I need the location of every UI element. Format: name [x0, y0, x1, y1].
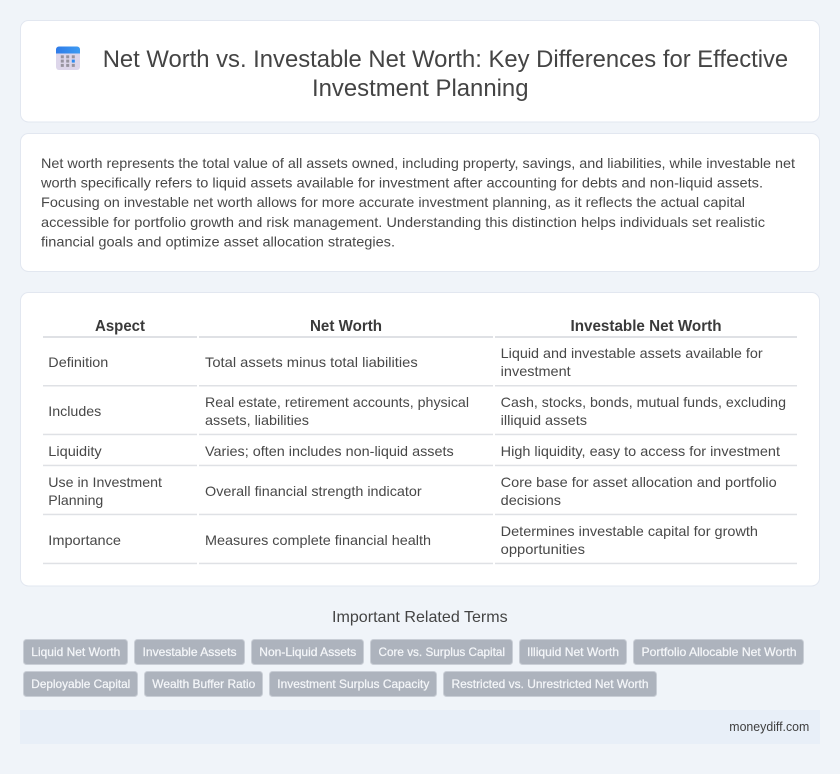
row: liquidity: High liquidity, easy to access for investment [501, 443, 780, 459]
row: definition: Liquid and investable assets available for [501, 345, 763, 361]
row: liquidity: Varies; often includes non-liquid assets [205, 443, 454, 459]
title: Net Worth vs. Investable Net Worth: Key Differences for Effective [103, 46, 788, 73]
related term tags: Illiquid Net Worth [527, 645, 619, 659]
related term tags: Investable Assets [142, 645, 236, 659]
summary text: Net worth represents the total value of all assets owned, including property, savings, and liabilities, while investable net [41, 155, 795, 171]
title: Investment Planning [312, 75, 528, 102]
table header row: Aspect [95, 318, 146, 335]
footer source text: moneydiff.com [729, 719, 809, 734]
row: importance: Importance [48, 532, 121, 548]
row: importance: Measures complete financial health [205, 532, 431, 548]
panel: summary paragraph [20, 134, 820, 272]
summary text: worth specifically refers to liquid assets available for investment after accounting for debts and non-liquid assets. [40, 175, 763, 191]
row: definition: Total assets minus total liabilities [205, 354, 418, 370]
row: includes: Includes [48, 403, 101, 419]
row: definition: investment [501, 363, 571, 379]
title [103, 46, 788, 102]
related term tags: Deployable Capital [31, 677, 130, 691]
related term tags [24, 640, 804, 696]
row: use in investment planning: Use in Investment [48, 474, 162, 490]
row: definition: Definition [48, 354, 108, 370]
row: importance: opportunities [501, 541, 585, 557]
summary text [40, 155, 795, 249]
summary text: financial goals and optimize asset allocation strategies. [41, 233, 395, 249]
table header row [43, 318, 797, 338]
related term tags: Wealth Buffer Ratio [152, 677, 256, 691]
header panel [20, 20, 820, 122]
row: use in investment planning: Overall financial strength indicator [205, 483, 422, 499]
related term tags: Core vs. Surplus Capital [378, 645, 505, 659]
row: use in investment planning: Planning [48, 492, 103, 508]
row: importance [43, 523, 797, 564]
row: use in investment planning: decisions [501, 492, 561, 508]
related term tags: Restricted vs. Unrestricted Net Worth [452, 677, 648, 691]
row: use in investment planning [43, 474, 797, 515]
row: liquidity [43, 443, 797, 466]
related term tags: Investment Surplus Capacity [277, 677, 429, 691]
related term tags: Non-Liquid Assets [259, 645, 356, 659]
row: definition [43, 345, 797, 386]
table header row: Net Worth [310, 318, 382, 335]
row: use in investment planning: Core base for asset allocation and portfolio [501, 474, 777, 490]
row: liquidity: Liquidity [48, 443, 102, 459]
summary text: accessible for portfolio growth and risk management. Understanding this distinction helps individuals set realistic [41, 214, 765, 230]
row: includes [43, 394, 797, 435]
related term tags: Liquid Net Worth [31, 645, 120, 659]
row: includes: Cash, stocks, bonds, mutual funds, excluding [501, 394, 786, 410]
footer bar [20, 710, 820, 744]
row: importance: Determines investable capital for growth [501, 523, 758, 539]
table header row: Investable Net Worth [570, 318, 722, 335]
panel: comparison table [20, 292, 820, 586]
row: includes: illiquid assets [501, 412, 587, 428]
related term tags: Portfolio Allocable Net Worth [642, 645, 796, 659]
row: includes: Real estate, retirement accounts, physical [205, 394, 469, 410]
row: includes: assets, liabilities [205, 412, 309, 428]
heading: important related terms: Important Related Terms [332, 609, 508, 626]
summary text: Focusing on investable net worth allows for more accurate investment planning, as it reflects the actual capital [41, 194, 745, 210]
icon: calendar [56, 46, 80, 70]
